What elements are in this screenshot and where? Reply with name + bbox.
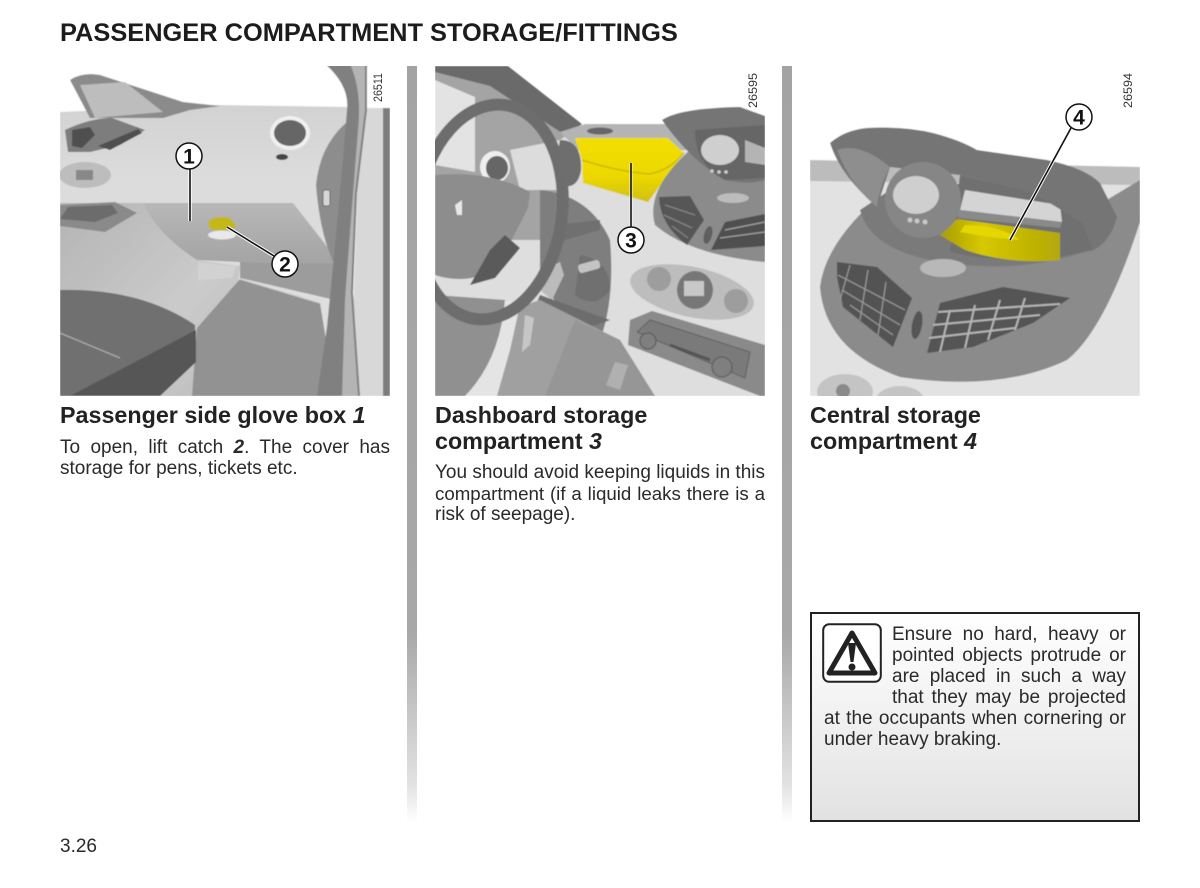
heading: dashboard storage	[435, 402, 647, 454]
text: warning: Ensure no hard, heavy or	[892, 624, 1126, 645]
binnacle	[662, 107, 765, 182]
lower console	[60, 203, 240, 396]
dashboard	[810, 160, 1140, 396]
centre stack	[65, 118, 145, 152]
callout: warning box	[810, 612, 1140, 822]
text: dashboard storage: You should avoid keeping liquids in this	[435, 462, 765, 483]
page number: 3.26	[60, 836, 97, 857]
lower vent	[60, 202, 137, 232]
callout 2	[227, 227, 298, 277]
door sill and frame	[353, 108, 384, 396]
callout 3	[618, 163, 644, 253]
callout 1: 1	[183, 146, 195, 168]
button	[920, 259, 966, 277]
stalk and switch	[540, 262, 564, 300]
reference number 26594: 26594	[1121, 73, 1135, 108]
dashboard	[60, 105, 350, 400]
reference number 26511: 26511	[371, 73, 385, 102]
catch	[208, 230, 236, 240]
divider bar: right	[782, 66, 792, 822]
radio	[628, 311, 765, 396]
panel: central storage illustration	[810, 73, 1140, 396]
window and pillar	[435, 72, 565, 240]
instrument hood	[70, 74, 220, 118]
text: warning: under heavy braking.	[824, 729, 1001, 750]
yellow compartment	[575, 138, 684, 202]
text: warning: that they may be projected	[892, 687, 1126, 708]
lower knobs	[817, 374, 873, 410]
text: dashboard storage	[435, 462, 766, 525]
round side vent	[510, 140, 560, 190]
yellow storage	[940, 219, 1060, 261]
text: warning: at the occupants when cornering or	[824, 708, 1126, 729]
icon: warning triangle	[822, 623, 882, 683]
callout 2: 2	[279, 254, 291, 276]
lower trim and floor	[490, 300, 620, 396]
text: warning	[824, 624, 1126, 750]
text: dashboard storage: compartment (if a liquid leaks there is a	[435, 483, 765, 504]
callout 3: 3	[625, 230, 637, 252]
text: dashboard storage: risk of seepage).	[435, 504, 575, 525]
seat	[60, 290, 195, 396]
vents	[659, 196, 704, 245]
heading: dashboard storage: Dashboard storage	[435, 402, 647, 428]
text: warning: pointed objects protrude or	[892, 645, 1126, 666]
side panel	[316, 123, 346, 261]
centre stack	[820, 180, 1140, 382]
lower fascia	[435, 125, 765, 396]
panel: glove box illustration	[60, 66, 390, 396]
climate controls	[59, 162, 111, 188]
text: warning: are placed in such a way	[892, 666, 1126, 687]
panel: dashboard storage illustration	[435, 66, 765, 396]
title: PASSENGER COMPARTMENT STORAGE/FITTINGS	[60, 19, 678, 47]
text: glove box: storage for pens, tickets etc.	[60, 458, 298, 479]
instrument dial	[885, 162, 961, 238]
callout 4	[1010, 104, 1092, 240]
heading: central storage: Central storage	[810, 402, 981, 428]
climate controls	[630, 264, 754, 320]
hood	[830, 128, 1117, 253]
heading: dashboard storage: compartment 3	[435, 428, 602, 454]
centre stack	[653, 150, 765, 262]
text: glove box: To open, lift catch 2. The cover has	[60, 437, 390, 458]
steering wheel rim	[435, 98, 570, 326]
pedal	[606, 362, 628, 390]
opening behind dial	[950, 175, 1093, 260]
heading: central storage: compartment 4	[810, 428, 977, 454]
column shroud	[540, 190, 611, 340]
dash top	[560, 124, 690, 150]
round vent	[270, 116, 310, 150]
steering wheel hub	[435, 174, 530, 279]
callout 1	[176, 143, 202, 221]
floor	[192, 279, 335, 396]
divider bar: left	[407, 66, 417, 822]
heading: glove box: Passenger side glove box 1	[60, 402, 366, 428]
right vent	[927, 287, 1070, 353]
left vent	[837, 262, 912, 347]
reference number 26595: 26595	[746, 73, 760, 108]
heading: central storage	[810, 402, 981, 454]
callout 4: 4	[1073, 106, 1085, 130]
glove box door	[143, 203, 340, 263]
text: glove box	[60, 437, 390, 479]
